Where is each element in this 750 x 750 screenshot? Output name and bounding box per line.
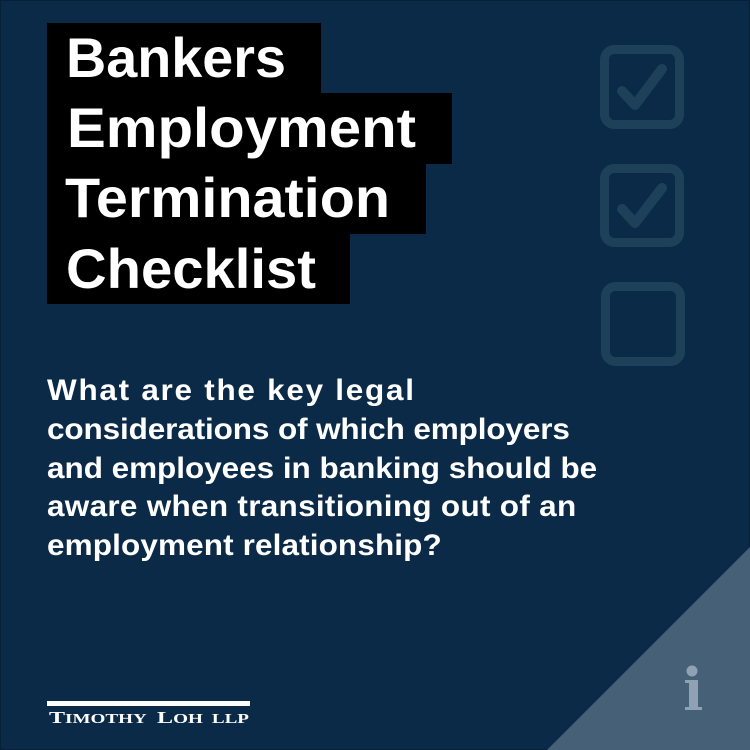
title text: Employment [67, 96, 416, 159]
question text: employment relationship? [47, 528, 442, 562]
title text [65, 26, 416, 300]
question text [47, 373, 597, 562]
title text: Termination [65, 166, 390, 229]
question text: considerations of which employers [47, 412, 570, 446]
question text: aware when transitioning out of an [47, 489, 576, 523]
icon: info letter i [685, 666, 702, 710]
corner triangle [547, 547, 750, 750]
icon: checked box 2 [604, 168, 680, 242]
title block [47, 23, 452, 304]
title text: Checklist [66, 237, 316, 300]
icon: checked box 1 [604, 50, 680, 124]
icon: empty box [606, 286, 680, 362]
question text: and employees in banking should be [47, 451, 597, 485]
question text: What are the key legal [47, 373, 414, 407]
logo: Timothy Loh LLP: T IMOTHY L OH LLP [49, 708, 249, 727]
corner info tab [547, 547, 750, 750]
checklist icons [604, 50, 680, 362]
title text: Bankers [66, 26, 286, 89]
logo: Timothy Loh LLP [47, 701, 250, 727]
title backing: stepped black panel [47, 23, 452, 304]
